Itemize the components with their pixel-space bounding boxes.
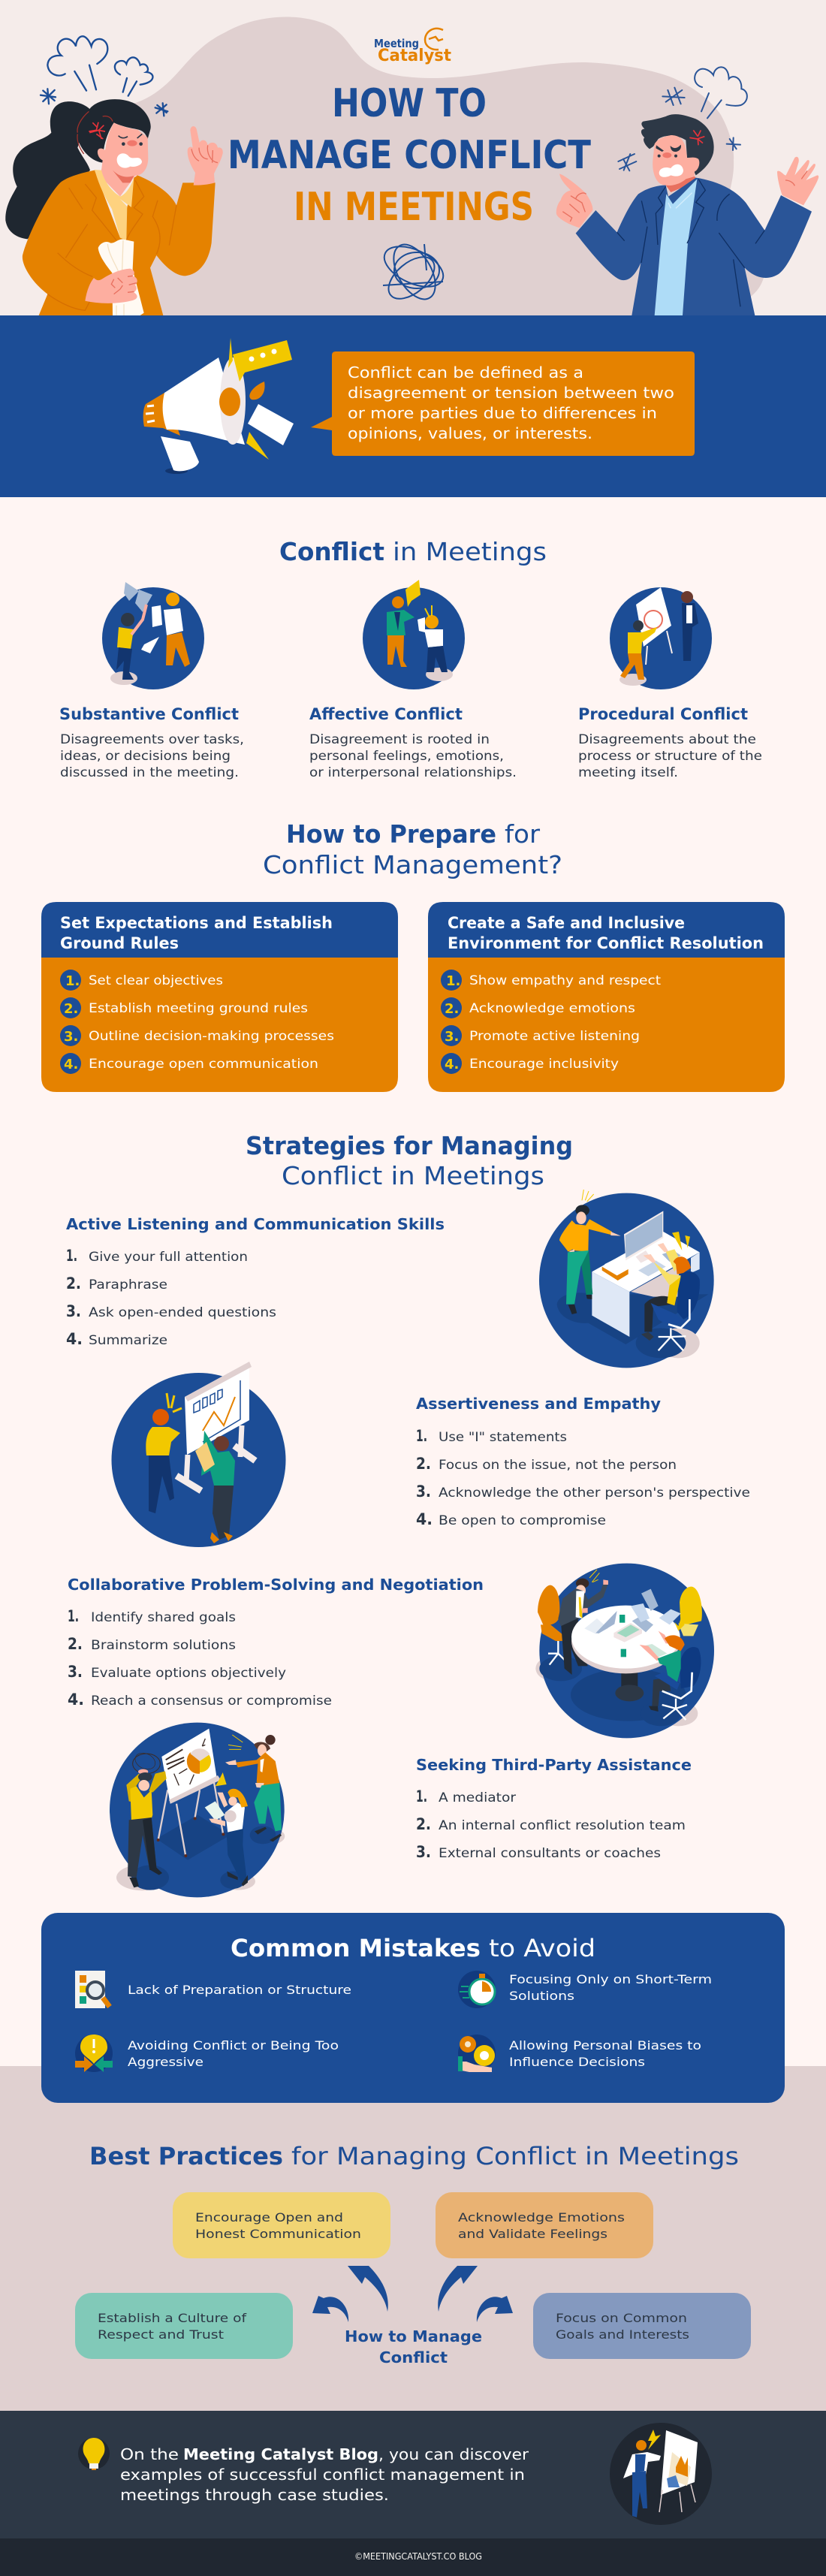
panel: safe environment: Environment for Conflict Resolution	[448, 934, 764, 952]
panel: set expectations: 3.	[64, 1029, 78, 1045]
strategy: assertiveness and empathy: 4.	[416, 1510, 433, 1528]
strategy: assertiveness and empathy: 2.	[416, 1455, 431, 1473]
card: open communication: Encourage Open and	[195, 2210, 343, 2225]
text block: Meeting Catalyst Blog	[183, 2445, 378, 2463]
panel: safe environment: 4.	[445, 1057, 459, 1072]
strategy: third-party assistance: 1.	[416, 1787, 427, 1805]
strategy: assertiveness and empathy: 3.	[416, 1483, 431, 1501]
card: acknowledge emotions: Acknowledge Emotions	[458, 2210, 625, 2225]
arrow: up right	[438, 2266, 478, 2312]
lower section background	[0, 2066, 826, 2411]
card: culture of respect: Respect and Trust	[98, 2327, 224, 2342]
strategy: third-party assistance: An internal conflict resolution team	[439, 1818, 686, 1833]
illustration: team at easel	[110, 1723, 285, 1897]
panel: safe environment: Show empathy and respect	[469, 973, 661, 988]
text block: Disagreement is rooted in	[309, 732, 490, 747]
icon: scribble	[378, 237, 449, 306]
text block	[120, 2445, 529, 2504]
text block: Disagreements over tasks,	[60, 732, 244, 747]
strategy: assertiveness and empathy: 1.	[416, 1427, 427, 1445]
illustration: whiteboard discussion	[111, 1362, 285, 1547]
strategy: third-party assistance: 3.	[416, 1843, 431, 1861]
callout: definition: or more parties due to differences in	[348, 404, 657, 422]
heading: how to prepare: Conflict Management?	[263, 850, 562, 879]
heading: Common Mistakes	[231, 1934, 481, 1962]
text block: , you can discover	[378, 2445, 529, 2463]
icon: gears and hand	[458, 2035, 496, 2072]
heading: conflict in meetings: in Meetings	[393, 537, 547, 566]
text block: Affective Conflict	[309, 705, 463, 723]
panel: common mistakes	[41, 1913, 785, 2103]
strategy: collaborative problem-solving	[68, 1576, 484, 1709]
strategy: collaborative problem-solving: 2.	[68, 1635, 83, 1653]
definition band	[0, 315, 826, 497]
text block: Avoiding Conflict or Being Too	[128, 2038, 339, 2053]
footer: ©MEETINGCATALYST.CO BLOG	[354, 2551, 482, 2562]
icon: document search	[75, 1971, 110, 2008]
text block: Procedural Conflict	[578, 705, 748, 723]
arrow: up left	[348, 2266, 388, 2312]
panel: safe environment: Encourage inclusivity	[469, 1057, 619, 1072]
card: common goals: Goals and Interests	[556, 2327, 689, 2342]
panel: common mistakes: Lack of Preparation or Structure	[128, 1983, 351, 1997]
strategy: active listening: Ask open-ended questions	[89, 1305, 276, 1320]
text block	[309, 732, 517, 780]
text block: discussed in the meeting.	[60, 765, 239, 780]
heading: to Avoid	[489, 1934, 595, 1962]
text block	[128, 2038, 339, 2069]
hero section	[0, 0, 826, 315]
text block: Aggressive	[128, 2055, 203, 2069]
strategy: third-party assistance	[416, 1756, 692, 1861]
icon: light bulb	[78, 2438, 110, 2470]
callout: definition: opinions, values, or interests.	[348, 424, 592, 442]
title: HOW TO	[332, 81, 487, 126]
panel: set expectations: 4.	[64, 1057, 78, 1072]
panel: set expectations: Set Expectations and Establish	[60, 914, 333, 932]
callout: definition	[311, 351, 695, 456]
strategy: collaborative problem-solving: Evaluate options objectively	[91, 1666, 286, 1681]
strategy: active listening: 2.	[66, 1274, 81, 1293]
heading: best practices: Best Practices	[89, 2142, 283, 2170]
panel: safe environment: Acknowledge emotions	[469, 1001, 635, 1016]
text block: Influence Decisions	[509, 2055, 645, 2069]
strategy: active listening	[66, 1215, 445, 1348]
card: common goals: Focus on Common	[556, 2311, 687, 2325]
heading: strategies: Conflict in Meetings	[282, 1161, 544, 1190]
card: open communication: Honest Communication	[195, 2227, 361, 2241]
strategy: collaborative problem-solving: Brainstorm solutions	[91, 1638, 236, 1653]
panel: set expectations	[41, 902, 398, 1092]
panel: procedural conflict	[578, 587, 762, 780]
illustration: angry man	[556, 67, 818, 315]
text block: Focusing Only on Short-Term	[509, 1972, 712, 1986]
card: culture of respect	[75, 2293, 293, 2359]
title	[228, 81, 591, 230]
text block: Disagreements about the	[578, 732, 756, 747]
heading: conflict in meetings: Conflict	[279, 537, 384, 566]
text block: On the	[120, 2445, 179, 2463]
panel: safe environment: 2.	[445, 1001, 459, 1017]
illustration: people throwing papers	[102, 582, 204, 689]
panel: set expectations: Outline decision-making processes	[89, 1029, 334, 1044]
text block: process or structure of the	[578, 749, 762, 764]
text block	[509, 2038, 701, 2069]
strategy: collaborative problem-solving: Reach a consensus or compromise	[91, 1694, 332, 1709]
text block: examples of successful conflict management in	[120, 2466, 525, 2484]
strategy: assertiveness and empathy: Focus on the issue, not the person	[439, 1458, 677, 1473]
panel: set expectations: 1.	[65, 973, 80, 989]
panel: safe environment: Create a Safe and Inclusive	[448, 914, 685, 932]
text block: Allowing Personal Biases to	[509, 2038, 701, 2053]
text block	[578, 732, 762, 780]
strategy: active listening: Summarize	[89, 1333, 167, 1348]
card: common goals	[533, 2293, 751, 2359]
strategy: active listening: 4.	[66, 1330, 83, 1348]
illustration: presenter	[610, 2423, 712, 2525]
panel: set expectations: Set clear objectives	[89, 973, 223, 988]
arrow: right	[477, 2296, 513, 2322]
heading: how to prepare: How to Prepare	[286, 819, 496, 849]
center label	[345, 2327, 482, 2366]
panel: affective conflict	[309, 580, 517, 780]
heading: strategies: Strategies for Managing	[246, 1131, 573, 1160]
strategy: third-party assistance: Seeking Third-Party Assistance	[416, 1756, 692, 1774]
strategy: active listening: 3.	[66, 1302, 81, 1320]
panel: set expectations: 2.	[64, 1001, 78, 1017]
panel: set expectations: Establish meeting ground rules	[89, 1001, 308, 1016]
text block: meetings through case studies.	[120, 2486, 389, 2504]
center label: How to Manage	[345, 2327, 482, 2345]
illustration: people at whiteboard	[610, 587, 712, 689]
strategy: assertiveness and empathy	[416, 1395, 750, 1528]
text block: or interpersonal relationships.	[309, 765, 517, 780]
text block: Substantive Conflict	[59, 705, 239, 723]
strategy: collaborative problem-solving: 1.	[68, 1607, 79, 1625]
background blob	[133, 17, 764, 315]
illustration: people arguing	[363, 580, 465, 689]
text block	[60, 732, 244, 780]
strategy: assertiveness and empathy: Be open to compromise	[439, 1513, 606, 1528]
card: acknowledge emotions	[436, 2192, 653, 2258]
strategy: third-party assistance: A mediator	[439, 1790, 516, 1805]
title: IN MEETINGS	[294, 185, 534, 230]
panel: substantive conflict	[59, 582, 244, 780]
strategy: collaborative problem-solving: 4.	[68, 1691, 84, 1709]
illustration: angry woman	[5, 36, 223, 315]
heading: how to prepare	[263, 819, 562, 879]
illustration: desk scene	[539, 1190, 714, 1368]
panel: set expectations: Ground Rules	[60, 934, 179, 952]
panel: safe environment: Promote active listening	[469, 1029, 640, 1044]
logo: Meeting	[374, 37, 419, 50]
strategy: assertiveness and empathy: Acknowledge the other person's perspective	[439, 1486, 750, 1501]
center label: Conflict	[379, 2348, 448, 2366]
heading: how to prepare: for	[505, 819, 540, 849]
arrow: left	[312, 2296, 348, 2322]
strategy: assertiveness and empathy: Use "I" statements	[439, 1430, 567, 1445]
strategy: active listening: Active Listening and Communication Skills	[66, 1215, 445, 1233]
strategy: active listening: Paraphrase	[89, 1277, 167, 1293]
text block: personal feelings, emotions,	[309, 749, 504, 764]
card: open communication	[173, 2192, 390, 2258]
strategy: collaborative problem-solving: Identify shared goals	[91, 1610, 236, 1625]
text block: meeting itself.	[578, 765, 678, 780]
strategy: active listening: 1.	[66, 1247, 77, 1265]
blog band	[0, 2411, 826, 2538]
heading: strategies	[246, 1131, 573, 1190]
title: MANAGE CONFLICT	[228, 133, 591, 178]
heading	[231, 1934, 595, 1962]
icon: stopwatch	[458, 1971, 496, 2008]
panel: set expectations: Encourage open communication	[89, 1057, 318, 1072]
icon: alert with arrows	[75, 2035, 113, 2072]
text block: Solutions	[509, 1989, 574, 2003]
card: acknowledge emotions: and Validate Feelings	[458, 2227, 607, 2241]
callout: definition: Conflict can be defined as a	[348, 363, 583, 382]
heading: conflict in meetings	[279, 537, 547, 566]
callout: definition: disagreement or tension between two	[348, 384, 674, 402]
heading: best practices: for Managing Conflict in Meetings	[291, 2142, 739, 2170]
strategy: assertiveness and empathy: Assertiveness and Empathy	[416, 1395, 661, 1413]
panel: safe environment: 1.	[446, 973, 460, 989]
logo: Catalyst	[378, 47, 451, 65]
icon: megaphone	[143, 338, 294, 474]
card: culture of respect: Establish a Culture of	[98, 2311, 246, 2325]
panel: safe environment	[428, 902, 785, 1092]
text block: ideas, or decisions being	[60, 749, 231, 764]
footer	[0, 2538, 826, 2576]
heading: best practices	[89, 2142, 739, 2170]
strategy: third-party assistance: 2.	[416, 1815, 431, 1833]
strategy: third-party assistance: External consultants or coaches	[439, 1846, 661, 1861]
panel: safe environment: 3.	[445, 1029, 459, 1045]
strategy: collaborative problem-solving: Collaborative Problem-Solving and Negotiation	[68, 1576, 484, 1594]
strategy: collaborative problem-solving: 3.	[68, 1663, 83, 1681]
logo	[374, 29, 451, 65]
text block	[509, 1972, 712, 2003]
illustration: round table meeting	[535, 1564, 714, 1738]
strategy: active listening: Give your full attention	[89, 1250, 248, 1265]
